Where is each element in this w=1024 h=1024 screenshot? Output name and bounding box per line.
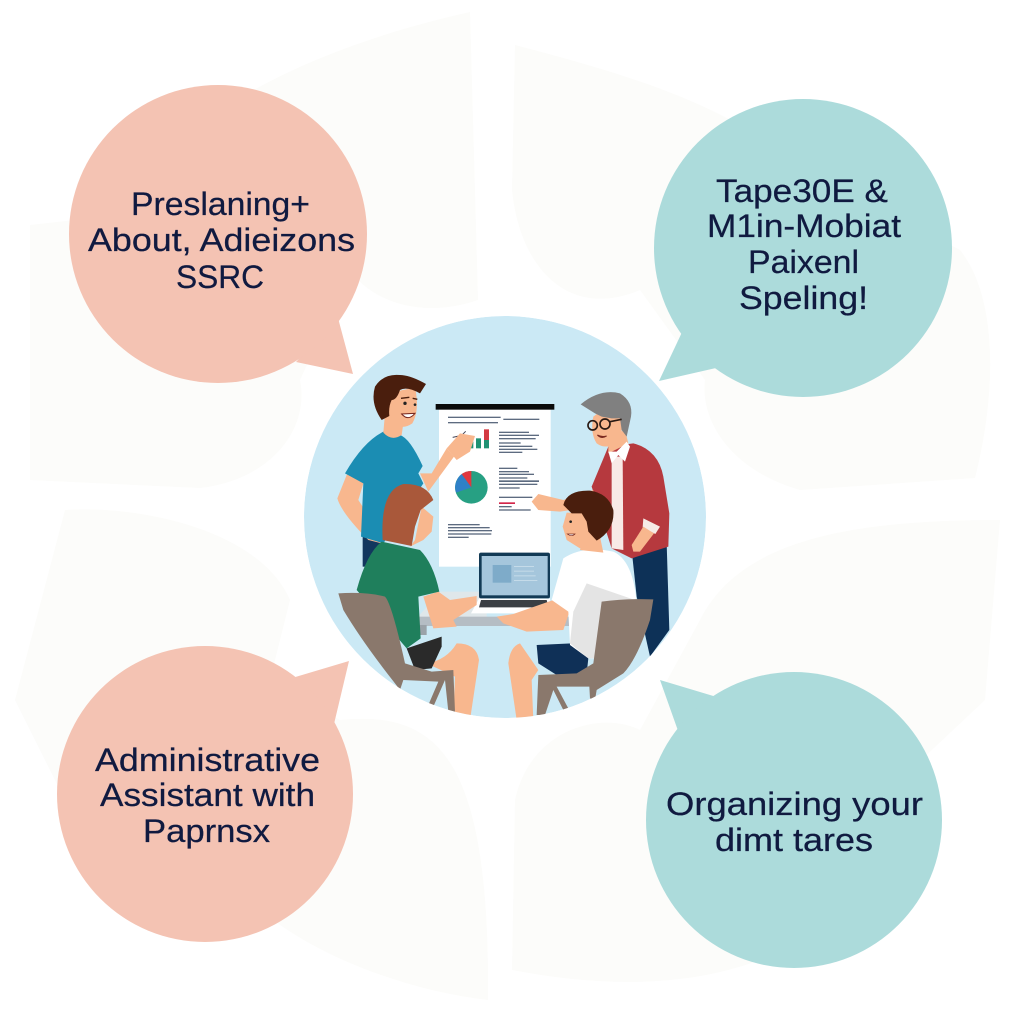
person: seated boy in white	[497, 491, 636, 720]
label: top left: About, Adieizons	[88, 222, 355, 258]
person: standing man in blue shirt	[337, 375, 475, 567]
label: top right: Tape30E &	[716, 173, 888, 209]
label: bottom left	[95, 742, 320, 849]
label: top right: Speling!	[739, 280, 868, 316]
presentation board	[436, 404, 554, 567]
label: bottom left: Paprnsx	[143, 813, 270, 849]
table	[417, 592, 574, 635]
central illustration: team meeting	[304, 316, 706, 720]
label: top left: Preslaning+	[131, 186, 310, 222]
speech bubble: top left	[69, 85, 367, 383]
person: standing man in red jacket	[532, 392, 669, 657]
label: top right	[707, 173, 901, 316]
label: top right: Paixenl	[748, 244, 859, 280]
label: top left	[88, 186, 355, 295]
bar chart	[453, 429, 489, 448]
label: top left: SSRC	[176, 259, 264, 295]
label: bottom left: Assistant with	[100, 777, 315, 813]
laptop	[471, 553, 551, 613]
label: bottom right	[666, 786, 923, 858]
person: seated woman in green	[357, 484, 479, 720]
label: top right: M1in-Mobiat	[707, 208, 901, 244]
chair: right	[537, 599, 653, 715]
speech bubble: top right	[654, 99, 952, 397]
label: bottom left: Administrative	[95, 742, 320, 778]
label: bottom right: Organizing your	[666, 786, 923, 822]
speech bubble: bottom left	[57, 646, 353, 942]
label: bottom right: dimt tares	[715, 822, 873, 858]
speech bubble: bottom right	[646, 672, 942, 968]
chair: left	[338, 593, 455, 712]
pie chart	[455, 471, 488, 504]
